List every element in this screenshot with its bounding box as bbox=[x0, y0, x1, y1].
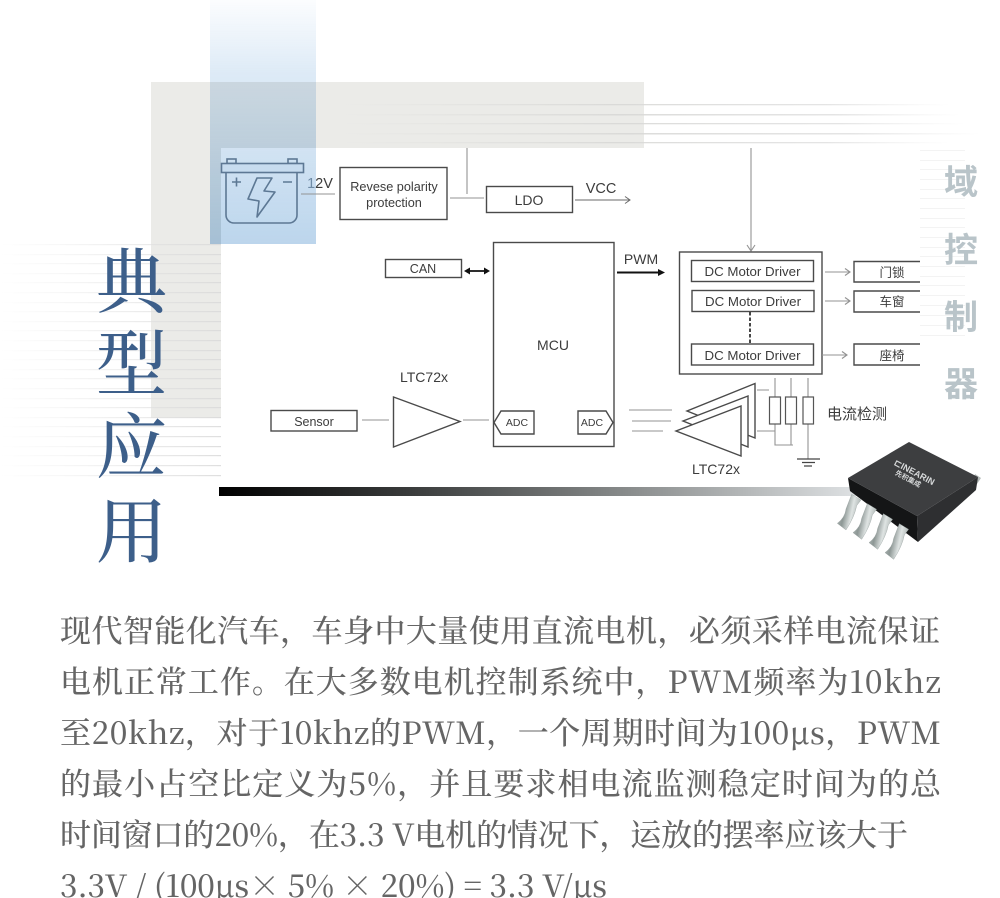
sensor chain bbox=[271, 369, 489, 447]
PWM arrow bbox=[617, 251, 665, 276]
gradient divider bar bbox=[219, 487, 859, 496]
title: 典 bbox=[96, 226, 172, 328]
MCU block: ADC bbox=[506, 417, 529, 429]
chip illustration bbox=[837, 442, 981, 559]
motor driver block bbox=[680, 148, 822, 374]
motor driver block: DC Motor Driver bbox=[704, 348, 801, 363]
chip front side bbox=[848, 478, 918, 542]
power input section bbox=[301, 148, 630, 220]
body paragraph bbox=[60, 606, 942, 898]
sensor chain: Sensor bbox=[294, 415, 334, 429]
background: grey panel bbox=[151, 82, 644, 418]
output loads: 门锁 bbox=[879, 265, 905, 280]
PWM arrow: PWM bbox=[624, 251, 658, 267]
MCU block: MCU bbox=[537, 337, 569, 353]
background: blue translucent band bbox=[210, 0, 316, 244]
sensor chain: LTC72x bbox=[400, 369, 448, 385]
shunt resistors and ground: 电流检测 bbox=[827, 406, 887, 423]
power input section: VCC bbox=[586, 181, 616, 197]
power input section: Revese polarity bbox=[350, 180, 438, 194]
chip right side bbox=[917, 477, 978, 542]
title: 型 bbox=[96, 308, 167, 410]
motor driver block: DC Motor Driver bbox=[704, 264, 801, 279]
shunt resistors and ground bbox=[757, 378, 887, 466]
icon: battery bbox=[222, 159, 304, 223]
title: 应 bbox=[96, 391, 167, 493]
motor driver block: DC Motor Driver bbox=[705, 294, 802, 309]
output loads: 座椅 bbox=[879, 348, 905, 363]
CAN block bbox=[386, 260, 490, 278]
chip marking: 先积集成 bbox=[893, 468, 923, 490]
chip far pin bbox=[973, 474, 981, 484]
chip pins bbox=[837, 494, 909, 559]
body paragraph: 时间窗口的20%，在3.3 V电机的情况下，运放的摆率应该大于 bbox=[60, 810, 908, 855]
chip top face bbox=[848, 442, 978, 516]
output loads: 车窗 bbox=[879, 294, 905, 309]
output loads bbox=[822, 262, 920, 365]
side heading bbox=[944, 164, 978, 404]
side heading: 域 bbox=[944, 164, 978, 202]
current sense amplifiers bbox=[629, 384, 755, 477]
side heading: 制 bbox=[944, 299, 978, 337]
background: top right stripes bbox=[340, 104, 980, 143]
side heading: 控 bbox=[944, 232, 978, 270]
MCU block bbox=[494, 242, 614, 446]
CAN block: CAN bbox=[410, 262, 436, 276]
body paragraph: 的最小占空比定义为5%，并且要求相电流监测稳定时间为的总 bbox=[60, 759, 942, 804]
MCU block: ADC bbox=[581, 417, 604, 429]
title bbox=[96, 226, 172, 578]
body paragraph: 至20khz，对于10khz的PWM，一个周期时间为100μs，PWM bbox=[60, 708, 941, 753]
block diagram bbox=[222, 148, 920, 477]
power input section: LDO bbox=[515, 192, 543, 208]
current sense amplifiers: LTC72x bbox=[692, 461, 740, 477]
power input section: 12V bbox=[307, 176, 333, 192]
background: left stripes bbox=[0, 244, 221, 476]
background: right column stripes bbox=[920, 150, 965, 336]
chip marking: ⊏INEARIN bbox=[892, 457, 936, 487]
body paragraph: 电机正常工作。在大多数电机控制系统中，PWM频率为10khz bbox=[60, 657, 941, 702]
side heading: 器 bbox=[944, 366, 978, 404]
title: 用 bbox=[96, 476, 167, 578]
power input section: protection bbox=[366, 196, 422, 210]
body paragraph: 现代智能化汽车，车身中大量使用直流电机，必须采样电流保证 bbox=[60, 606, 940, 651]
